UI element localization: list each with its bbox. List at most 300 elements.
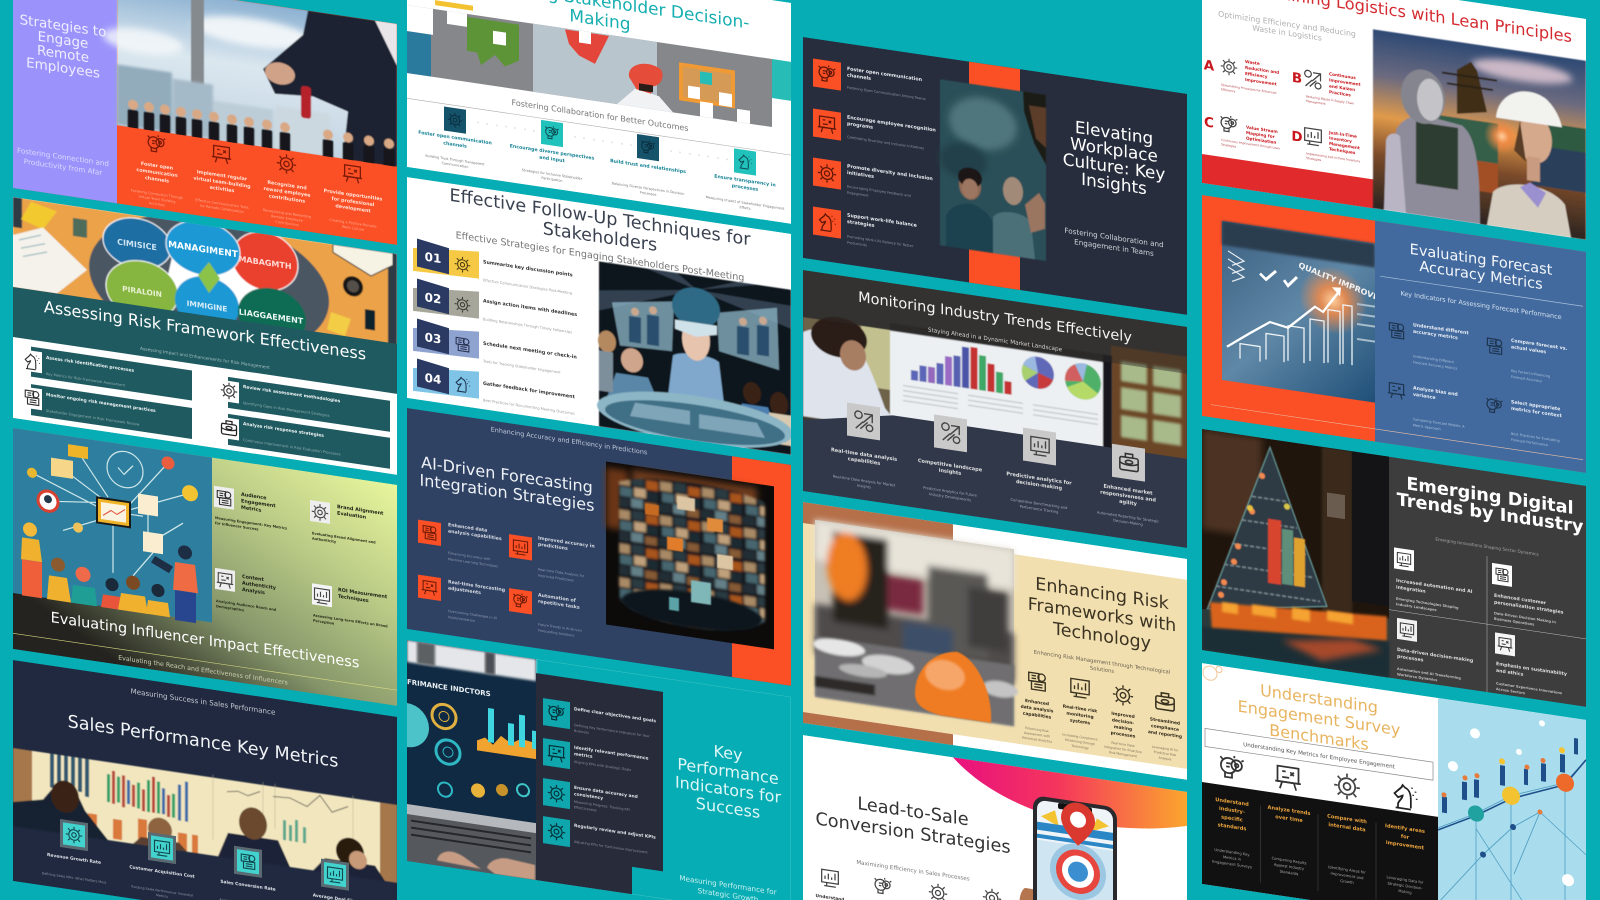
connecting dots	[477, 121, 728, 161]
item: communication: Foster open	[141, 161, 174, 172]
subtitle: Assessing Impact and Enhancements for Risk Management	[140, 346, 270, 371]
icon	[548, 745, 565, 763]
item: accuracy: Improved accuracy in	[538, 535, 595, 550]
item C	[1204, 112, 1280, 155]
item: audience engagement: Audience	[241, 492, 267, 502]
step 4: Measuring Impact of Stakeholder Engagement	[706, 195, 785, 211]
item B: Continuous	[1329, 71, 1356, 80]
metric: revenue growth: Revenue Growth Rate	[47, 852, 101, 866]
icon	[217, 490, 231, 506]
step 2: Strategies for Inclusive Stakeholder	[522, 168, 583, 181]
icon	[548, 822, 565, 842]
item: communication	[131, 135, 183, 206]
panel: Monitoring Industry Trends Effectively	[803, 270, 1187, 548]
item: decision-making: Workforce Dynamics	[1397, 672, 1437, 682]
subtitle: Solutions	[1090, 665, 1114, 675]
lower divider	[1211, 404, 1583, 460]
item: balance: Productivity	[847, 241, 867, 247]
item: accuracy metrics	[1389, 319, 1469, 373]
column 1: Engagement Surveys	[1212, 860, 1252, 869]
metric: revenue growth	[42, 816, 107, 885]
blue panel	[1375, 221, 1586, 473]
item: predictive analytics: decision-making	[1016, 479, 1062, 492]
item D: Inventory	[1329, 135, 1352, 144]
item: objectives: Defining Key Performance Indicators for Your	[574, 723, 650, 739]
item: communication: Fostering Open Communication Among Teams	[847, 86, 926, 101]
metric: conversion rate: Sales Conversion Rate	[220, 879, 276, 893]
icon	[1120, 453, 1138, 472]
item: recognition: Recognizing and Rewarding	[263, 208, 311, 219]
item: recognition: reward employee	[264, 186, 311, 199]
item: data analysis: Assessment with	[1024, 731, 1050, 739]
item D: Just-in-Time	[1328, 130, 1357, 139]
item: market responsiveness: Enhanced market	[1103, 483, 1153, 497]
item: data analysis: Enhanced data	[448, 522, 487, 534]
item: real-time data: Insights	[857, 484, 871, 490]
icon	[277, 153, 296, 175]
item: brand alignment: Brand Alignment	[337, 504, 384, 517]
column 1: industry-	[1219, 806, 1245, 816]
icon	[25, 353, 40, 370]
icon: lightbulb gear	[1220, 754, 1244, 780]
icon	[1305, 70, 1321, 89]
item: real-time data: capabilities	[848, 456, 880, 467]
title: Integration Strategies	[420, 470, 594, 515]
panel: Elevating Workplace Culture	[803, 37, 1187, 315]
icon: settings	[1334, 772, 1360, 801]
panel: Understanding Engagement Survey Benchmarks	[1202, 663, 1586, 900]
item: communication: channels	[145, 175, 169, 185]
item: communication: Foster open communication	[847, 66, 923, 83]
item: competitive insights: insights	[939, 468, 961, 477]
icon	[222, 420, 236, 436]
item: compare forecast: actual values	[1511, 344, 1546, 355]
photo: businessman picking figure	[103, 0, 397, 170]
column 1: Understand	[1215, 797, 1249, 808]
item: diversity: initiatives	[847, 170, 874, 180]
title: Sales Performance Key Metrics	[68, 712, 338, 772]
item: compliance: Predictive Risk	[1154, 750, 1177, 757]
metric: acquisition cost: Metrics	[156, 893, 168, 899]
orange band	[117, 125, 397, 245]
step 03: Schedule next meeting or check-in	[483, 341, 577, 361]
icon	[1487, 396, 1502, 414]
item: audience engagement: Engagement	[241, 498, 276, 509]
decorative circles	[1203, 664, 1222, 682]
icon	[1113, 684, 1133, 707]
item A: Waste	[1245, 59, 1260, 66]
item: relevant metrics: Identify relevant performance	[574, 745, 648, 762]
column 4: Leveraging Data for	[1387, 875, 1424, 885]
icon	[328, 867, 342, 883]
panel: Enhancing Risk Frameworks with Technology	[803, 502, 1187, 780]
item: monitoring: Monitoring through	[1065, 738, 1095, 746]
panel: Evaluating Influencer Impact Effectiveness	[13, 428, 397, 706]
subtitle: Evaluating the Reach and Effectiveness of Influencers	[118, 655, 288, 687]
network illustration panel	[1438, 698, 1586, 900]
column 1: Metrics in	[1223, 855, 1242, 862]
lower overlay band	[803, 402, 1187, 548]
item: personalization: personalization strategies	[1494, 600, 1564, 616]
item: audience engagement	[214, 486, 287, 530]
subtitle: Emerging Innovations Shaping Sector Dynamics	[1435, 537, 1539, 558]
item: compare forecast: Key Factors Influencing	[1511, 369, 1550, 379]
item A: Streamlining Processes for Enhanced	[1221, 83, 1276, 95]
item: automation: integration	[1396, 585, 1426, 595]
item B: Improvement	[1329, 77, 1361, 87]
column 2: over time	[1275, 814, 1303, 824]
icon	[448, 112, 462, 129]
item: audience engagement: Measuring Engagement: Key Metrics	[215, 516, 287, 531]
icon	[456, 337, 469, 352]
item: content authenticity	[215, 568, 276, 612]
accent strip	[732, 456, 791, 686]
title: Engage	[38, 29, 88, 52]
icon	[1388, 382, 1405, 400]
item: balance: Support work-life balance	[847, 213, 918, 229]
item: review KPIs	[543, 816, 656, 860]
item D: D	[1291, 128, 1303, 146]
item: real-time data: Real-time Data Analysis for Market	[833, 474, 896, 488]
pie chart right	[1065, 360, 1101, 402]
step 4: Efforts	[739, 205, 751, 211]
item: development: Work Culture	[342, 225, 364, 232]
gradient arc	[953, 757, 1187, 839]
icon	[455, 256, 470, 274]
icon	[148, 134, 165, 153]
subtitle: Fostering Collaboration and	[1064, 226, 1164, 249]
item: sustainability: and ethics	[1496, 668, 1524, 678]
item: diversity: Encouraging Employee Feedback and	[847, 185, 911, 198]
item: diversity: Promote diversity and inclusion	[847, 164, 933, 182]
icon	[818, 163, 836, 184]
item: monitoring	[24, 388, 156, 426]
item: market responsiveness: Automated Reporting for Strategic	[1097, 511, 1159, 524]
item: compare forecast: Compare forecast vs.	[1511, 338, 1567, 352]
title: AI-Driven Forecasting	[421, 453, 593, 497]
item: recognition: Recognize and	[267, 180, 307, 192]
item C: Optimization	[1246, 136, 1276, 145]
item: decision-making: Risk Management	[1109, 750, 1138, 759]
column 2: Analyze trends	[1268, 805, 1310, 817]
step 1	[418, 103, 492, 173]
column 4: improvement	[1386, 840, 1425, 852]
column 2	[1268, 805, 1310, 878]
item: accuracy: Real-time Data Analysis for	[538, 567, 585, 578]
item: monitoring	[1062, 677, 1098, 752]
item: compare forecast: Forecast Accuracy	[1511, 375, 1542, 383]
item: bias and variance: Metric Approach	[1413, 423, 1441, 431]
icon: gear	[929, 882, 947, 900]
metric: acquisition cost: Customer Acquisition Cost	[129, 864, 195, 880]
item: data analysis: Enhancing Accuracy with	[448, 551, 491, 561]
icon	[312, 503, 328, 522]
icon	[423, 526, 436, 540]
column 1	[1212, 797, 1252, 869]
item: data analysis	[1021, 671, 1054, 744]
item: content authenticity: Analyzing Audience Reach and	[216, 599, 277, 612]
item B: and Kaizen	[1329, 83, 1355, 92]
step 04: 04	[425, 371, 441, 387]
item: forecasting adjustments: Implementation	[448, 615, 475, 623]
icon	[221, 381, 237, 400]
step 3: Build trust and relationships	[610, 158, 686, 175]
sidebar panel	[13, 0, 117, 203]
icon	[217, 572, 233, 589]
item: decision-making: processes	[1111, 730, 1136, 740]
item: ROI measurement	[312, 583, 388, 634]
subtitle: Effective Strategies for Engaging Stakeholders Post-Meeting	[456, 230, 744, 284]
item: forecasting adjustments	[418, 575, 505, 628]
photo: laptop KPI dashboard: FRIMANCE INDCTORS	[407, 677, 491, 698]
item: accuracy metrics: accuracy metrics	[1413, 329, 1458, 341]
icon	[513, 592, 528, 608]
column 3: Improvement and	[1330, 872, 1364, 880]
item: team building: activities	[210, 185, 235, 194]
item: personalization: Business Operations	[1494, 617, 1534, 627]
item: decision-making: making	[1114, 724, 1132, 733]
illustration band	[407, 0, 791, 130]
panel: Emerging Digital Trends by Industry	[1202, 429, 1586, 707]
metric: revenue growth: Defining Sales KPIs: What Matters Most	[42, 871, 107, 885]
item: compare forecast	[1487, 334, 1567, 387]
title: Technology	[1052, 619, 1151, 654]
item: metrics for context: Best Practices for Evaluating	[1511, 432, 1560, 443]
item: communication: communication	[136, 167, 178, 179]
subtitle: Enhancing Accuracy and Efficiency in Predictions	[491, 425, 648, 457]
icon: knight strategy	[1394, 784, 1417, 810]
diagram labels: MANAGIMENT	[168, 240, 239, 260]
item: balance: strategies	[847, 219, 875, 229]
panel: Evaluating Forecast Accuracy Metrics	[1202, 195, 1586, 473]
title overlay band	[803, 270, 1187, 374]
photo: woman in headset with holographic screens	[597, 261, 793, 458]
step 04: Best Practices for Documenting Meeting Outcomes	[483, 398, 575, 416]
column 3: Compare with	[1327, 814, 1367, 825]
step 01: Summarize key discussion points	[483, 259, 573, 279]
title: Monitoring Industry Trends Effectively	[858, 289, 1132, 346]
step 1: Foster open communication	[418, 130, 492, 147]
item A: Efficiency	[1245, 71, 1268, 79]
item: review	[220, 380, 341, 419]
step 03	[413, 318, 577, 377]
icon	[1487, 338, 1502, 354]
title: Accuracy Metrics	[1419, 258, 1543, 293]
title: Making	[569, 6, 631, 35]
brown bottom strip	[803, 712, 953, 745]
item: competitive insights: Industry Developments	[929, 492, 971, 502]
item: personalization: Data-Driven Decision Making in	[1494, 611, 1556, 624]
item: compliance: compliance	[1151, 723, 1179, 733]
item: sustainability	[1495, 632, 1567, 702]
item C: Value Stream	[1246, 125, 1278, 134]
icon	[343, 164, 362, 184]
icon	[241, 854, 255, 870]
icon	[548, 784, 565, 804]
item: decision-making: Real-time Data	[1111, 741, 1135, 748]
item: compliance: Analysis	[1159, 756, 1172, 762]
step 04	[413, 358, 576, 416]
item: data analysis: Advanced Analytics	[1022, 735, 1053, 744]
item: data analysis: Enhanced	[1025, 698, 1049, 707]
item: brand alignment	[310, 500, 384, 544]
item: personalization	[1492, 563, 1564, 631]
icon	[1221, 58, 1237, 76]
item: objectives	[543, 698, 656, 745]
step 4: Ensure transparency in	[714, 173, 776, 189]
item: team building: Implement regular	[197, 169, 248, 183]
item: automation	[509, 588, 582, 639]
brown top strip	[803, 502, 953, 545]
item D: Techniques	[1329, 146, 1356, 155]
icon	[855, 411, 873, 432]
diagram labels: CIMISICE	[117, 237, 157, 252]
step 02: Building Relationships Through Timely Follow-Ups	[483, 317, 572, 334]
title: Engagement Survey	[1238, 697, 1401, 740]
title: Culture: Key	[1063, 149, 1165, 184]
item B: B	[1292, 70, 1302, 87]
panel: Effective Follow-Up Techniques	[407, 177, 793, 458]
item: decision-making: decision-	[1112, 717, 1134, 727]
column 4: Identify areas	[1385, 823, 1425, 835]
item: accuracy	[509, 531, 595, 586]
column 1: standards	[1218, 822, 1246, 832]
title: Key	[714, 741, 743, 765]
subtitle: Productivity from Afar	[24, 157, 102, 177]
icon	[455, 296, 470, 314]
title: Evaluating Forecast	[1410, 241, 1553, 279]
item A: Improvement	[1245, 77, 1277, 87]
diagram labels: IMMIGINE	[187, 299, 227, 314]
item: bias and variance: variance	[1413, 392, 1436, 401]
item D	[1291, 124, 1361, 168]
step 2: and input	[539, 155, 565, 164]
column 3: internal data	[1328, 822, 1366, 834]
column 2: Standards	[1280, 870, 1298, 876]
title: Conversion Strategies	[815, 808, 1011, 858]
icon	[818, 116, 836, 134]
column 4: Making	[1398, 889, 1412, 895]
panel: Streamlining Logistics with Lean Principles	[1202, 0, 1586, 240]
dark information panel	[1202, 782, 1438, 900]
item C: Mapping for	[1246, 130, 1276, 139]
divider line	[13, 633, 397, 690]
item: sustainability: Customer Experience Innovations	[1496, 682, 1562, 695]
step 03: 03	[425, 330, 441, 347]
icon	[456, 377, 470, 393]
item: market responsiveness: responsiveness and	[1100, 489, 1156, 504]
grid lines	[1389, 542, 1586, 707]
icon	[819, 64, 835, 82]
icon	[1496, 568, 1508, 582]
item: data accuracy: Effectiveness	[574, 805, 597, 813]
step 02	[413, 278, 577, 335]
photo: man viewing dashboards	[803, 300, 1187, 477]
title: Effective Follow-Up Techniques for	[449, 186, 751, 250]
item: team building: for Remote Collaboration	[200, 204, 244, 214]
step 1: Building Trust Through Transparent	[425, 154, 485, 167]
item: diversity: Engagement	[847, 191, 869, 198]
diagram labels: LIAGGAEMENT	[239, 307, 304, 326]
icon	[1389, 323, 1404, 339]
column 4	[1385, 823, 1425, 897]
icon	[739, 154, 752, 170]
item: audience engagement: Metrics	[241, 505, 261, 514]
icon	[1071, 678, 1089, 699]
photo: robot and engineer at port	[1373, 29, 1586, 240]
item: competitive insights	[918, 412, 983, 504]
item: monitoring: Technology	[1070, 744, 1089, 750]
item B	[1292, 66, 1361, 111]
title: Evaluating Influencer Impact Effectiveness	[51, 610, 359, 672]
item: automation: Forecasting Solutions	[538, 628, 574, 638]
item A: A	[1204, 57, 1215, 75]
column 2: Comparing Results	[1272, 856, 1306, 865]
step 02: 02	[425, 290, 441, 307]
step 1: Communication	[442, 161, 468, 169]
icon: automation	[983, 887, 1001, 900]
item: development: for professional	[332, 196, 375, 208]
item: automation: Automation of	[538, 592, 577, 604]
column 3: Identifying Areas for	[1328, 865, 1366, 875]
item: automation: Emerging Technologies Shaping	[1396, 597, 1459, 610]
icon	[1400, 623, 1414, 637]
subtitle: Optimizing Efficiency and Reducing	[1218, 9, 1356, 39]
icon: presentation board	[1275, 765, 1301, 791]
divider	[407, 98, 791, 155]
item B: Practices	[1329, 89, 1351, 98]
item: accuracy metrics: Understanding Different	[1413, 354, 1455, 364]
accent strip	[969, 62, 1020, 290]
item: relevant metrics	[543, 738, 648, 781]
item: review KPIs: Adjusting KPIs for Continuous Improvement	[574, 840, 648, 855]
subtitle: Maximizing Efficiency in Sales Processes	[856, 860, 970, 883]
item: metrics for context: metrics for context	[1511, 406, 1562, 419]
item: brand alignment: Authenticity	[312, 536, 337, 544]
item: recognition: programs	[847, 121, 873, 131]
item: development: Provide opportunities	[324, 188, 383, 203]
panel: Strategies to Engage Remote Employees	[13, 0, 397, 245]
item: balance: Promoting Work-Life Balance for Better	[847, 235, 914, 248]
item: team building	[193, 142, 251, 215]
item: relevant metrics: metrics	[574, 751, 593, 760]
item: brand alignment: Evaluating Brand Alignment and	[312, 531, 376, 545]
item: decision-making: Automation and AI Transforming	[1397, 667, 1461, 680]
metric: acquisition cost: Tracking Sales Performance: Essential	[130, 884, 193, 898]
title: Insights	[1081, 169, 1147, 198]
item: recognition	[813, 108, 936, 155]
title: Workplace	[1070, 133, 1158, 166]
item: development	[324, 162, 383, 235]
item: brand alignment: Evaluation	[337, 510, 367, 521]
step 02: Assign action items with deadlines	[483, 298, 577, 318]
item C: Strategies	[1221, 142, 1237, 149]
icon	[1029, 672, 1045, 691]
item: identification: Key Metrics for Risk Framework Assessment	[46, 372, 126, 388]
item: monitoring: Stakeholder Engagement in Risk Framework Review	[46, 409, 140, 427]
item: automation	[1394, 547, 1473, 618]
item: data accuracy: consistency	[574, 791, 603, 802]
subtitle: Understanding Key Metrics for Employee Engagement	[1243, 742, 1396, 771]
item: bias and variance: Comparing Forecast Models: A	[1413, 417, 1465, 429]
subtitle: Key Indicators for Assessing Forecast Performance	[1400, 289, 1562, 321]
photo: laptop KPI dashboard	[385, 637, 536, 880]
item: communication: Virtual Team Building	[139, 195, 175, 204]
item: response	[220, 417, 341, 456]
item: monitoring: Increasing Compliance	[1062, 732, 1098, 742]
item: real-time data	[831, 400, 897, 493]
title band	[13, 287, 397, 394]
